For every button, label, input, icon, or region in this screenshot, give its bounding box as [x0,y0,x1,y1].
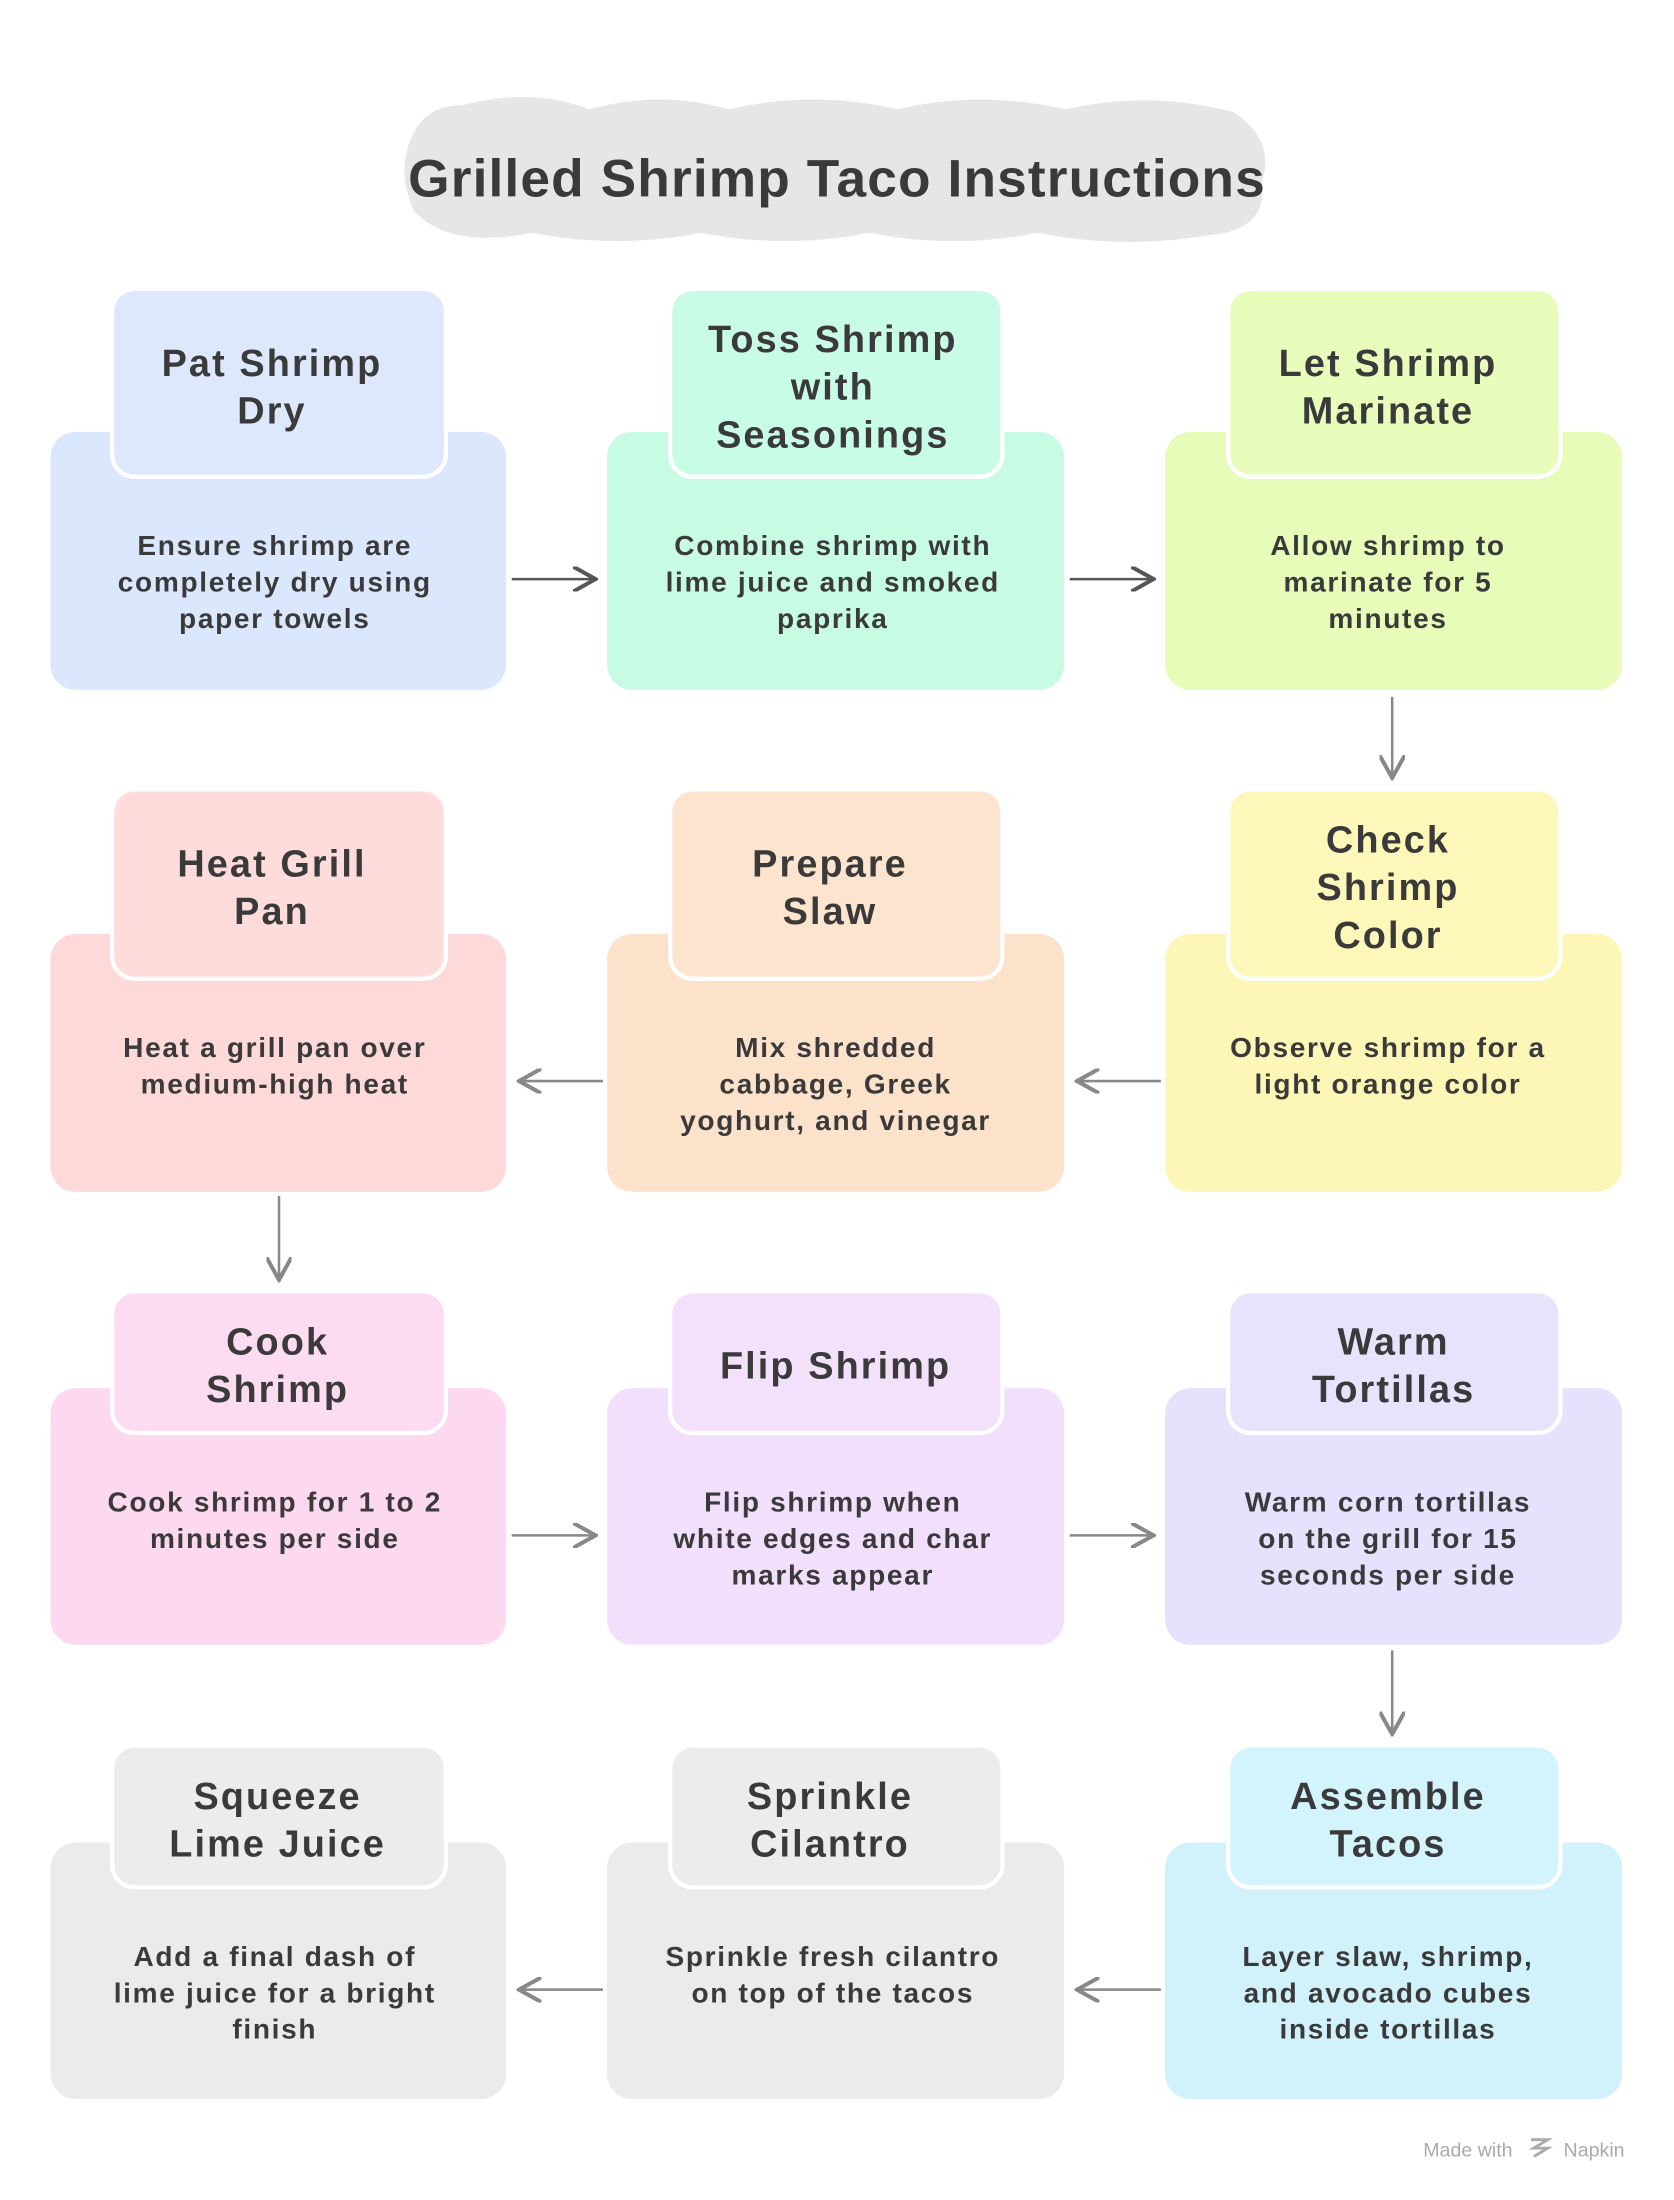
step 10: Assemble Tacos: Layer slaw, shrimp, [1242,1941,1534,1972]
step 9: Warm Tortillas [1165,1291,1622,1645]
step 5: Prepare Slaw: Slaw [783,891,877,933]
step 6: Check Color: Color [1333,915,1443,957]
step 1: Pat Shrimp Dry: completely dry using [118,567,432,598]
step 6: Check Color: light orange color [1254,1069,1521,1100]
step 5: Prepare Slaw: Prepare [752,843,908,885]
step 2: Toss Shrimp: paprika [777,603,889,634]
step 3: Marinate: Allow shrimp to [1270,530,1506,561]
step 11: Sprinkle Cilantro: Sprinkle [747,1776,913,1818]
step 2: Toss Shrimp: Combine shrimp with [674,530,991,561]
step 12: Squeeze Lime Juice: Squeeze [193,1776,362,1818]
step 9: Warm Tortillas: on the grill for 15 [1258,1523,1518,1554]
step 3: Marinate: Marinate [1302,390,1474,432]
step 4: Heat Grill Pan: Heat a grill pan over [123,1032,426,1063]
step 3: Marinate: Let Shrimp [1279,343,1497,385]
step 8: Flip Shrimp: Flip Shrimp [720,1345,951,1387]
step 7: Cook Shrimp [50,1291,506,1645]
step 9: Warm Tortillas: Tortillas [1312,1369,1475,1411]
step 6: Check Color: Check [1326,820,1450,862]
step 2: Toss Shrimp: lime juice and smoked [666,567,1000,598]
step 1: Pat Shrimp Dry [50,289,506,690]
step 6: Check Color: Observe shrimp for a [1230,1032,1546,1063]
step 10: Assemble Tacos: Tacos [1329,1823,1447,1865]
footer: Made with Napkin [1423,2140,1625,2162]
step 2: Toss Shrimp: with [790,367,875,409]
step 4: Heat Grill Pan: medium-high heat [141,1069,409,1100]
step 12: Squeeze Lime Juice [50,1746,506,2099]
step 9: Warm Tortillas: seconds per side [1260,1559,1516,1590]
footer: Made with Napkin: Made with [1423,2140,1513,2162]
step 5: Prepare Slaw: cabbage, Greek [719,1069,952,1100]
step 8: Flip Shrimp [607,1291,1064,1645]
step 7: Cook Shrimp: Shrimp [206,1369,349,1411]
step 11: Sprinkle Cilantro: on top of the tacos [691,1977,974,2008]
step 11: Sprinkle Cilantro: Cilantro [750,1823,910,1865]
step 12: Squeeze Lime Juice: Lime Juice [169,1823,386,1865]
step 4: Heat Grill Pan [50,789,506,1192]
step 7: Cook Shrimp: Cook shrimp for 1 to 2 [108,1487,442,1518]
step 2: Toss Shrimp: Seasonings [716,414,950,456]
title [404,97,1266,242]
step 10: Assemble Tacos: inside tortillas [1280,2014,1496,2045]
step 12: Squeeze Lime Juice: lime juice for a bright [114,1977,436,2008]
step 4: Heat Grill Pan: Heat Grill [177,843,367,885]
step 3: Marinate: minutes [1328,603,1448,634]
step 1: Pat Shrimp Dry: Pat Shrimp [162,343,382,385]
step 8: Flip Shrimp: white edges and char [672,1523,992,1554]
step 10: Assemble Tacos: Assemble [1290,1776,1486,1818]
step 9: Warm Tortillas: Warm corn tortillas [1245,1487,1531,1518]
step 9: Warm Tortillas: Warm [1338,1321,1450,1363]
step 12: Squeeze Lime Juice: finish [232,2014,317,2045]
step 7: Cook Shrimp: Cook [226,1321,329,1363]
step 6: Check Color [1165,789,1622,1192]
step 5: Prepare Slaw: yoghurt, and vinegar [680,1105,991,1136]
arrows [279,579,1392,1990]
step 8: Flip Shrimp: Flip shrimp when [704,1487,961,1518]
step 1: Pat Shrimp Dry: Dry [237,390,307,432]
step 10: Assemble Tacos: and avocado cubes [1244,1977,1532,2008]
step 4: Heat Grill Pan: Pan [234,891,310,933]
step 7: Cook Shrimp: minutes per side [150,1523,400,1554]
step 5: Prepare Slaw [607,789,1064,1192]
step 11: Sprinkle Cilantro: Sprinkle fresh cilantro [665,1941,1000,1972]
step 1: Pat Shrimp Dry: Ensure shrimp are [137,530,412,561]
title: Grilled Shrimp Taco Instructions [408,149,1266,208]
step 3: Marinate: marinate for 5 [1284,567,1492,598]
step 2: Toss Shrimp: Toss Shrimp [708,319,958,361]
step 5: Prepare Slaw: Mix shredded [735,1032,936,1063]
step 6: Check Color: Shrimp [1317,867,1459,909]
footer: Made with Napkin: Napkin [1564,2140,1625,2162]
step 2: Toss Shrimp [607,289,1064,690]
step 1: Pat Shrimp Dry: paper towels [179,603,371,634]
step 10: Assemble Tacos [1165,1746,1622,2099]
step 12: Squeeze Lime Juice: Add a final dash of [133,1941,416,1972]
step 8: Flip Shrimp: marks appear [732,1559,934,1590]
step 3: Marinate [1165,289,1622,690]
step 11: Sprinkle Cilantro [607,1746,1064,2099]
